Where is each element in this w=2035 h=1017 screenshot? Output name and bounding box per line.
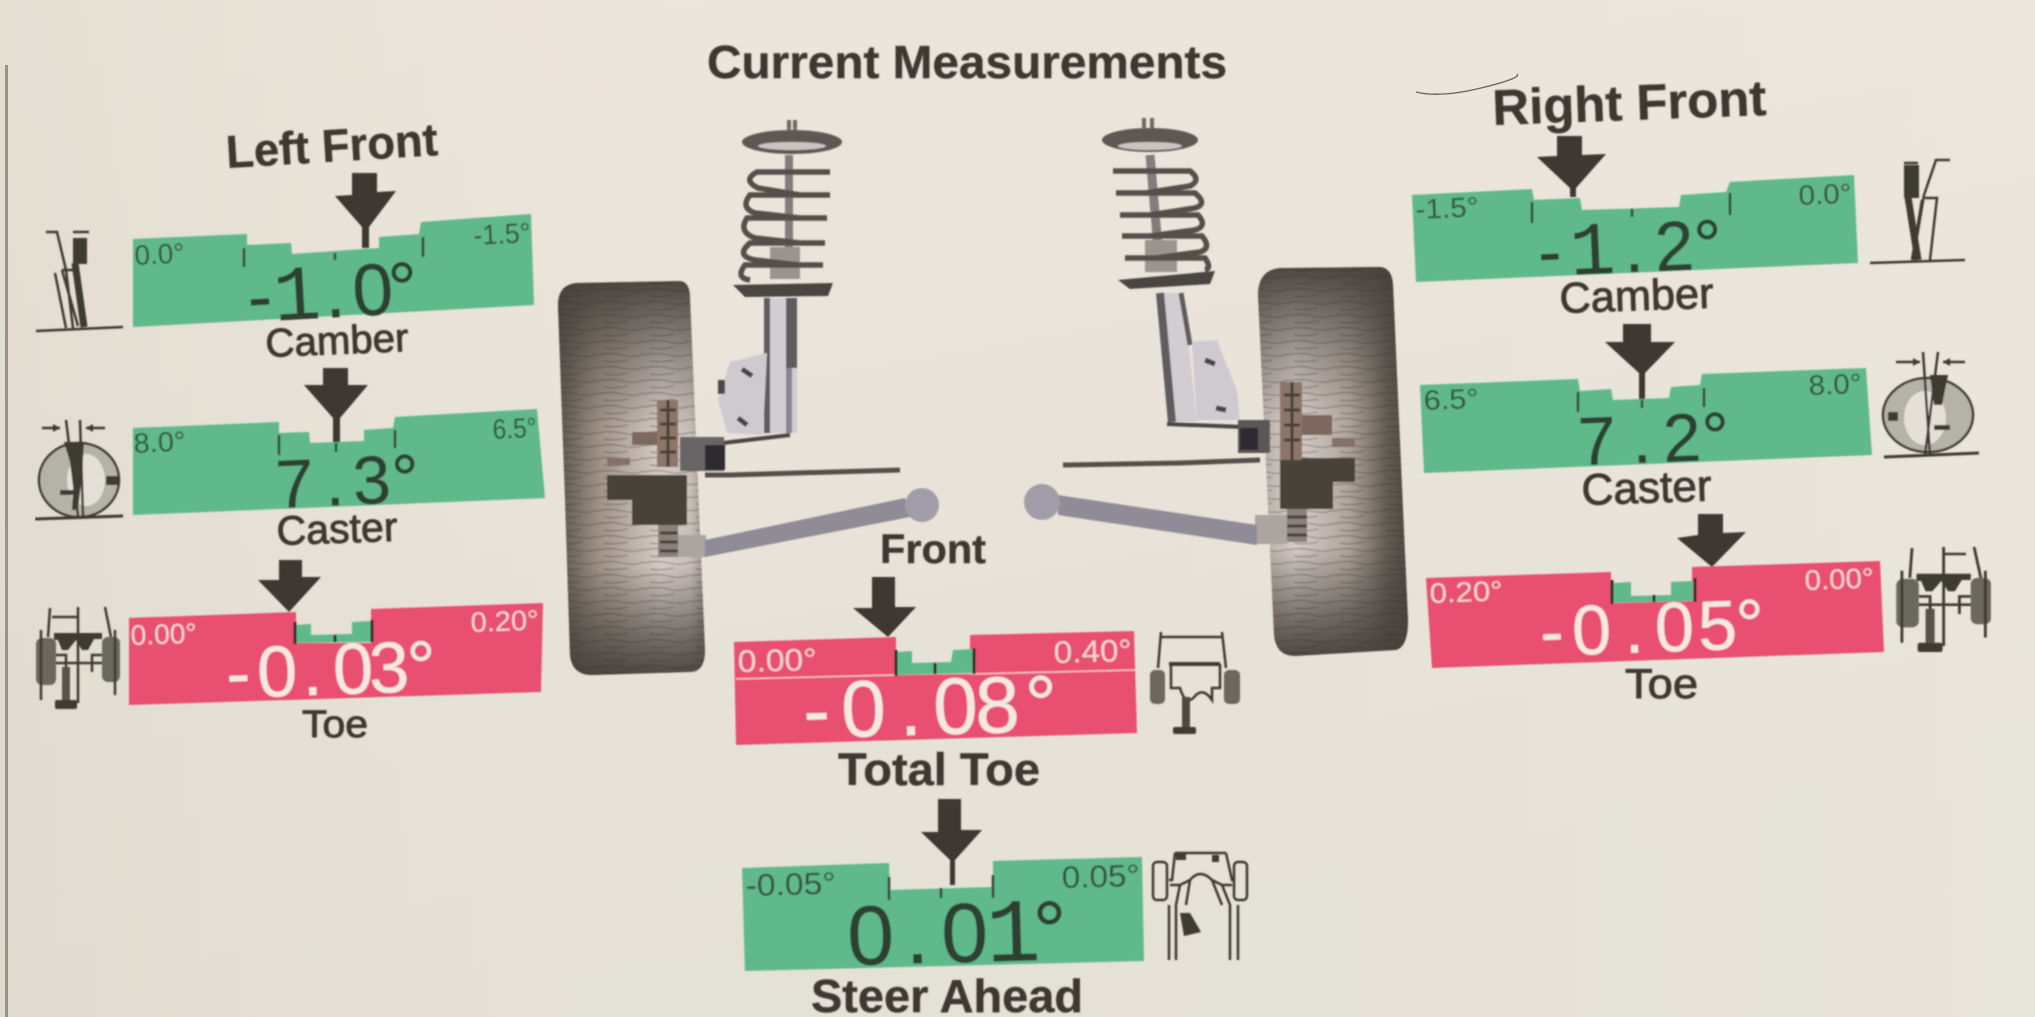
- icon: right caster: [1883, 352, 1979, 457]
- value: -: [802, 665, 831, 755]
- value: -: [225, 633, 252, 714]
- left camber gauge: -1.5°: [473, 217, 531, 251]
- value: -: [1536, 212, 1563, 291]
- red band: [1426, 561, 1884, 668]
- value: °: [406, 627, 437, 708]
- green centre notch: [296, 621, 371, 643]
- left caster gauge: [133, 368, 545, 554]
- green band: [1412, 175, 1858, 282]
- value: 5: [1697, 586, 1738, 665]
- label: Camber: [1559, 270, 1714, 323]
- steer ahead gauge: [742, 799, 1144, 1017]
- green centre notch: [897, 649, 974, 675]
- scale limits: 6.5°: [1423, 383, 1479, 416]
- value: °: [386, 247, 420, 330]
- value: 0: [350, 249, 395, 332]
- title: Current Measurements: [707, 36, 1227, 88]
- left camber gauge: [133, 173, 534, 366]
- value: 7: [274, 445, 315, 523]
- left wheel and suspension: [558, 120, 939, 675]
- icon: left caster: [35, 420, 123, 519]
- value: .: [1623, 589, 1645, 668]
- left strut and spring: [718, 120, 842, 443]
- arrow: [304, 368, 368, 450]
- arrow: [1677, 514, 1746, 567]
- value: °: [1701, 398, 1731, 475]
- arrow: [1537, 136, 1606, 197]
- value: .: [1631, 401, 1652, 478]
- value: 0: [332, 629, 375, 710]
- right caster gauge: 8.0°: [1808, 368, 1862, 401]
- value: 7: [1577, 403, 1617, 480]
- scale limits: 0.00°: [130, 618, 197, 651]
- icon: left camber: [36, 232, 123, 331]
- green centre notch: [1613, 581, 1693, 603]
- value: °: [390, 440, 421, 518]
- value: 8: [974, 660, 1021, 750]
- value: .: [898, 663, 923, 752]
- green band: [1420, 368, 1872, 473]
- scale limits: 0.20°: [1429, 575, 1503, 609]
- icon: right toe: [1896, 547, 1991, 652]
- label: Caster: [276, 504, 398, 554]
- total toe gauge: 0.40°: [1053, 633, 1132, 670]
- label: Toe: [1625, 660, 1698, 707]
- scale limits: 8.0°: [133, 426, 186, 459]
- value: 0: [1654, 587, 1695, 667]
- label: Caster: [1581, 461, 1712, 515]
- green band: [133, 214, 534, 327]
- value: °: [1024, 659, 1058, 749]
- scale limits: -0.05°: [745, 866, 836, 903]
- value: 2: [1653, 206, 1695, 286]
- left front heading: Left Front: [224, 113, 439, 178]
- value: -: [245, 256, 274, 338]
- arrow: [853, 577, 916, 637]
- label: Total Toe: [838, 744, 1040, 795]
- left tyre: [558, 281, 705, 675]
- green band: [742, 857, 1144, 971]
- steer ahead gauge: 0.05°: [1061, 858, 1140, 895]
- right toe gauge: [1426, 514, 1884, 707]
- scale limits: -1.5°: [1415, 191, 1479, 225]
- value: -: [1539, 592, 1565, 671]
- arrow: [921, 799, 982, 885]
- right knuckle, tie rod and lower arm: [1024, 420, 1270, 545]
- value: .: [301, 631, 324, 711]
- label: Camber: [265, 316, 409, 366]
- total toe gauge: [734, 577, 1137, 795]
- left toe gauge: 0.20°: [470, 605, 539, 638]
- value: 1: [271, 254, 323, 345]
- value: 0: [256, 632, 299, 713]
- value: .: [1622, 209, 1645, 287]
- scale limits: 0.0°: [134, 237, 185, 271]
- icon: steer ahead: [1153, 853, 1247, 960]
- value: .: [323, 444, 346, 521]
- value: °: [1692, 205, 1723, 284]
- left caster gauge: 6.5°: [492, 412, 537, 445]
- right strut and spring: [1102, 118, 1243, 427]
- right camber gauge: [1412, 136, 1858, 323]
- left knuckle, tie rod and lower arm: [680, 437, 939, 557]
- value: 0: [1571, 590, 1612, 670]
- value: 1: [1568, 211, 1617, 298]
- value: 0: [846, 888, 895, 983]
- icon: right camber: [1870, 160, 1965, 263]
- value: 3: [351, 442, 392, 519]
- red band: [129, 603, 543, 705]
- label: Toe: [302, 704, 368, 746]
- value: .: [904, 887, 930, 981]
- value: 2: [1662, 399, 1702, 477]
- value: 0: [840, 664, 887, 754]
- value: 3: [368, 628, 410, 709]
- right wheel and suspension: [1024, 118, 1408, 656]
- right hub: [1255, 382, 1355, 544]
- value: .: [322, 252, 347, 334]
- icon: left toe: [36, 607, 120, 709]
- value: 0: [932, 661, 979, 751]
- arrow: [258, 560, 321, 612]
- right front heading: Right Front: [1491, 70, 1768, 136]
- green band: [133, 409, 545, 515]
- value: 0: [940, 885, 989, 981]
- value: °: [1032, 883, 1068, 978]
- front heading: Front: [880, 526, 986, 572]
- value: 1: [985, 886, 1042, 989]
- scale limits: 0.00°: [737, 642, 817, 679]
- red band: [734, 631, 1137, 745]
- icon: total toe: [1150, 632, 1240, 734]
- value: °: [1735, 585, 1765, 664]
- right toe gauge: 0.00°: [1804, 562, 1874, 596]
- left hub: [607, 400, 706, 557]
- arrow: [1605, 324, 1675, 408]
- right camber gauge: 0.0°: [1798, 178, 1852, 211]
- arrow: [335, 173, 396, 248]
- right tyre: [1258, 267, 1408, 656]
- right caster gauge: [1420, 324, 1872, 515]
- left toe gauge: [129, 560, 543, 746]
